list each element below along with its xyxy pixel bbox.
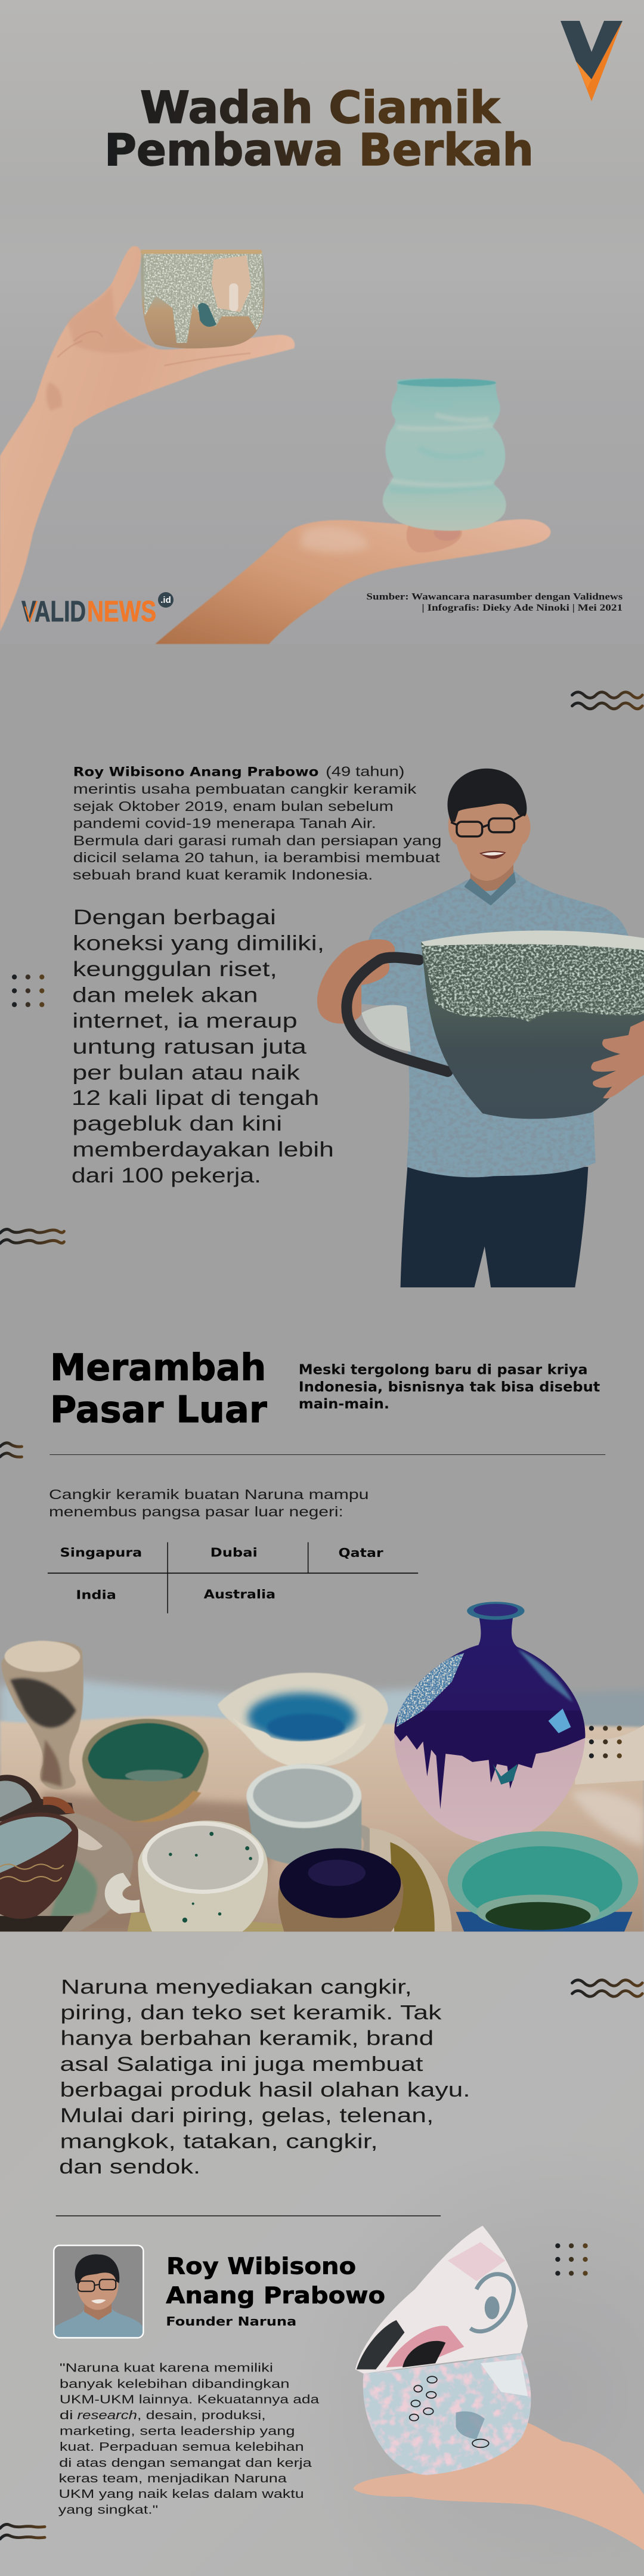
text block: founder introduction: Roy Wibisono Anang Prabowo xyxy=(73,765,318,779)
text block: business growth: 12 kali lipat di tengah xyxy=(72,1087,319,1110)
text block: founder introduction xyxy=(73,763,441,883)
heading xyxy=(50,1346,267,1431)
white cup with handle xyxy=(246,1764,377,1865)
teal bowl xyxy=(448,1831,638,1931)
green bowl xyxy=(82,1719,209,1822)
subheading: Indonesia, bisnisnya tak bisa disebut xyxy=(299,1380,600,1395)
decoration: wave bottom left xyxy=(0,1230,64,1243)
text block: quote: UKM-UKM lainnya. Kekuatannya ada xyxy=(60,2393,320,2407)
tablecloth xyxy=(0,1716,644,1944)
founder name xyxy=(166,2253,385,2329)
logo: Validnews wordmark xyxy=(21,592,174,628)
decoration: wave top right xyxy=(572,692,642,709)
illustration: left hand holding cup xyxy=(0,246,295,631)
text block: quote: "Naruna kuat karena memiliki xyxy=(60,2361,273,2375)
mouth xyxy=(479,851,506,859)
heading: Pasar Luar xyxy=(50,1389,267,1431)
text block: market intro: menembus pangsa pasar luar negeri: xyxy=(49,1504,343,1519)
text block: founder introduction: sejak Oktober 2019, enam bulan sebelum xyxy=(73,798,394,814)
founder name: Founder Naruna xyxy=(166,2314,296,2329)
source credit xyxy=(366,592,623,613)
text block: product range: berbagai produk hasil olahan kayu. xyxy=(60,2079,470,2101)
stacked dark cups xyxy=(0,1775,78,1919)
background: section 2 and 3 xyxy=(0,644,644,1932)
collar shadow xyxy=(464,872,516,905)
text block: business growth: per bulan atau naik xyxy=(72,1061,301,1084)
table: export countries: Dubai xyxy=(210,1545,258,1559)
top bowl xyxy=(355,2225,528,2373)
illustration: wavy teal cup xyxy=(383,378,506,531)
text block: business growth: pagebluk dan kini xyxy=(72,1113,282,1135)
trousers xyxy=(401,1167,588,1287)
table: export countries: Qatar xyxy=(339,1546,384,1560)
text block: founder introduction: Bermula dari garasi rumah dan persiapan yang xyxy=(73,832,441,848)
logo: Validnews wordmark: VALID xyxy=(21,596,86,628)
background: section 1 xyxy=(0,0,644,644)
pouring bowl with blue glaze xyxy=(218,1673,388,1768)
decoration: wave bottom left xyxy=(0,2524,45,2539)
founder name: Roy Wibisono xyxy=(166,2253,356,2280)
photo: ceramics on a table xyxy=(0,1602,644,1944)
text block: business growth: untung ratusan juta xyxy=(72,1036,307,1058)
plate with green glaze xyxy=(0,1809,134,1931)
hair xyxy=(447,769,527,822)
icon: Validnews V logo xyxy=(561,21,623,101)
neck xyxy=(470,862,513,891)
subheading: main-main. xyxy=(299,1397,389,1412)
panel: header hero xyxy=(0,21,623,644)
illustration: hand holding stacked painted bowls xyxy=(353,2225,644,2550)
bottom bowl xyxy=(363,2353,531,2475)
panel: products and quote xyxy=(0,1976,644,2550)
decoration: dots over photo xyxy=(589,1726,622,1758)
text block: quote: di xyxy=(60,2408,73,2422)
founder name: Anang Prabowo xyxy=(166,2283,385,2309)
text block: founder introduction: dicicil selama 20 tahun, ia berambisi membuat xyxy=(73,850,440,865)
right hand xyxy=(591,1020,644,1098)
cup rim xyxy=(421,931,644,950)
panel: founder profile xyxy=(0,692,644,1287)
table: export countries: Australia xyxy=(204,1587,275,1602)
title: Wadah Ciamik xyxy=(140,82,501,134)
text block: business growth: dari 100 pekerja. xyxy=(72,1165,261,1187)
title xyxy=(104,82,534,176)
text block: business growth: koneksi yang dimiliki, xyxy=(73,932,324,955)
logo: Validnews wordmark: NEWS xyxy=(87,596,156,628)
text block: market intro xyxy=(49,1487,369,1519)
text block: market intro: Cangkir keramik buatan Naruna mampu xyxy=(49,1487,369,1502)
gold plate xyxy=(128,1828,452,1931)
cup handle gap xyxy=(361,1005,411,1052)
text block: quote: kuat. Perpaduan semua kelebihan xyxy=(60,2440,304,2454)
goblet xyxy=(1,1641,83,1789)
illustration: speckled tan cup xyxy=(141,250,265,348)
text block: business growth: internet, ia meraup xyxy=(72,1010,298,1032)
text block: quote: marketing, serta leadership yang xyxy=(60,2425,295,2438)
cup handle xyxy=(346,958,448,1072)
text block: product range: mangkok, tatakan, cangkir, xyxy=(60,2130,378,2153)
text block: business growth: keunggulan riset, xyxy=(73,958,277,981)
hand xyxy=(353,2421,644,2550)
text block: product range xyxy=(59,1976,470,2178)
text block: product range: hanya berbahan keramik, brand xyxy=(60,2027,434,2049)
title: Pembawa Berkah xyxy=(104,125,534,176)
source credit: | Infografis: Dieky Ade Ninoki | Mei 2021 xyxy=(422,603,623,613)
logo: Validnews wordmark: .id xyxy=(160,595,171,605)
text block: business growth xyxy=(72,906,334,1187)
left arm and hand xyxy=(317,939,395,1024)
decoration: dots right xyxy=(555,2243,588,2276)
text block: quote: di atas dengan semangat dan kerja xyxy=(59,2456,312,2470)
source credit: Sumber: Wawancara narasumber dengan Validnews xyxy=(366,592,623,602)
subheading xyxy=(299,1363,600,1412)
decoration: wave top right xyxy=(572,1980,642,1996)
table: export countries: India xyxy=(76,1587,116,1602)
text block: business growth: memberdayakan lebih xyxy=(72,1138,334,1161)
cup glaze texture xyxy=(421,943,644,1027)
text block: product range: Mulai dari piring, gelas, telenan, xyxy=(60,2104,434,2127)
dark speckled bowl xyxy=(278,1849,403,1940)
decoration: dots left xyxy=(12,974,44,1007)
text block: product range: asal Salatiga ini juga membuat xyxy=(60,2053,423,2076)
blue drip glazed vase xyxy=(390,1602,592,1843)
glasses xyxy=(451,813,526,837)
text block: quote: keras team, menjadikan Naruna xyxy=(58,2472,287,2485)
table: export countries: Singapura xyxy=(60,1545,142,1559)
text block: quote: , desain, produksi, xyxy=(137,2408,266,2422)
shirt xyxy=(361,870,629,1177)
text block: quote: research xyxy=(77,2408,137,2422)
heading: Merambah xyxy=(50,1346,266,1389)
text block: quote: banyak kelebihan dibandingkan xyxy=(60,2377,290,2391)
text block: product range: dan sendok. xyxy=(59,2156,200,2178)
text block: founder introduction: sebuah brand kuat keramik Indonesia. xyxy=(73,867,373,883)
head xyxy=(448,792,531,881)
illustration: founder holding giant cup xyxy=(317,769,644,1287)
decoration: wave xyxy=(0,1443,22,1457)
text block: quote: UKM yang naik kelas dalam waktu xyxy=(58,2487,304,2501)
background: section 4 xyxy=(0,1931,644,2576)
cup body xyxy=(421,933,644,1119)
text block: product range: Naruna menyediakan cangkir, xyxy=(61,1976,412,1998)
text block: business growth: dan melek akan xyxy=(72,984,258,1007)
text block: business growth: Dengan berbagai xyxy=(73,906,276,929)
photo backdrop xyxy=(0,1680,644,1752)
illustration: right hand holding cup xyxy=(155,519,550,644)
table: export countries xyxy=(48,1542,418,1614)
text block: product range: piring, dan teko set keramik. Tak xyxy=(60,2002,442,2024)
subheading: Meski tergolong baru di pasar kriya xyxy=(299,1363,588,1378)
speckled white cup xyxy=(105,1820,268,1931)
text block: founder introduction: merintis usaha pembuatan cangkir keramik xyxy=(73,781,417,797)
text block: quote: yang singkat." xyxy=(58,2503,158,2516)
text block: founder introduction: (49 tahun) xyxy=(326,763,404,779)
text block: quote xyxy=(58,2361,320,2516)
text block: founder introduction: pandemi covid-19 menerapa Tanah Air. xyxy=(73,815,376,831)
panel: overseas market xyxy=(0,1346,644,1944)
portrait: Roy Wibisono xyxy=(54,2246,143,2338)
